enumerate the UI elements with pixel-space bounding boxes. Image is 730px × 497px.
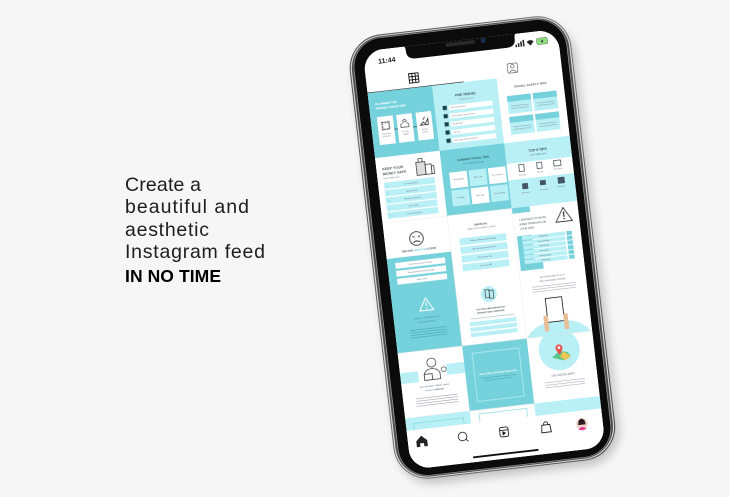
post: get the best travel deals bbox=[398, 346, 470, 418]
post: summer travel tips: Check weather bbox=[494, 191, 506, 195]
post: terms and conditions: PROPERTY AND CONDITIONS bbox=[477, 309, 505, 315]
post: keep your money safe: KEEP YOUR bbox=[382, 165, 404, 171]
post: keep your money safe: 5 bbox=[389, 214, 392, 218]
post: use google maps: USE GOOGLE MAPS bbox=[551, 372, 575, 378]
icon: search bbox=[458, 432, 469, 442]
post: keep your money safe: Beware of pickpockets bbox=[404, 196, 422, 201]
post: summer travel tips bbox=[440, 143, 512, 216]
post: unusual: Pack a power strip bbox=[478, 254, 492, 259]
post: top 6 tips: FOR TRAVELLERS bbox=[530, 152, 547, 157]
post: planning the perfect road trip: destination bbox=[383, 134, 391, 138]
post: unusual: UNUSUAL bbox=[473, 221, 488, 227]
post: keep your money safe: Split your cash bbox=[406, 189, 418, 193]
post: unusual: Get a local SIM bbox=[480, 263, 492, 267]
notch bbox=[401, 32, 519, 60]
post: 7 mistakes to avoid bbox=[512, 201, 585, 273]
icon: nervous face bbox=[409, 231, 424, 246]
post: summer travel tips: SUMMER TRAVEL TIPS bbox=[457, 155, 489, 162]
icon: tagged tab bbox=[507, 63, 518, 73]
post: keep your money safe bbox=[375, 151, 447, 223]
post: use google maps bbox=[526, 325, 600, 404]
post: 7 mistakes to avoid: No backups bbox=[542, 259, 550, 262]
post: summer travel tips: Pack light bbox=[457, 196, 465, 200]
post: pre-travel checklist: Get travel insurance bbox=[451, 105, 466, 109]
post: framed teal quote bbox=[462, 338, 534, 411]
text block: headline: beautiful and bbox=[125, 196, 249, 218]
post: travel safety tips bbox=[506, 70, 570, 136]
post: 7 mistakes to avoid: Bad planning bbox=[539, 244, 549, 248]
post: 7 mistakes to avoid: Not researching bbox=[538, 239, 549, 243]
post: summer travel tips: Use sunscreen bbox=[492, 173, 503, 177]
post: keep your money safe: 2 bbox=[387, 191, 389, 196]
post: top 6 tips: Get insured bbox=[540, 188, 548, 191]
post: 7 mistakes to avoid: Overpacking bbox=[539, 235, 548, 238]
post: summer travel tips: Stay hydrated bbox=[453, 177, 464, 181]
phone mockup bbox=[346, 12, 622, 487]
post: pre-travel checklist: PRE-TRAVEL bbox=[455, 91, 477, 98]
icon: luggage bbox=[415, 157, 435, 175]
post: 7 mistakes to avoid: Trusting strangers bbox=[539, 253, 552, 257]
post: buy a sim card with phone: ANY VIDEOS AND DRIVING bbox=[540, 277, 566, 283]
post: tips for nervous flyers: Keep yourself busy during the flight bbox=[408, 268, 435, 274]
post: top 6 tips: Save money bbox=[554, 168, 562, 171]
post: pre-travel checklist: Get cash bbox=[453, 130, 460, 134]
grid gaps bbox=[382, 201, 600, 418]
icon: shopping bag bbox=[541, 421, 551, 433]
post: 7 mistakes to avoid: No insurance bbox=[540, 249, 550, 252]
post: top 6 tips: TOP 6 TIPS bbox=[528, 147, 548, 153]
text block: headline: Instagram feed bbox=[125, 241, 265, 263]
home indicator bbox=[473, 449, 539, 458]
phone shadow bbox=[351, 20, 622, 487]
post: pre-travel checklist: Pay your bills bbox=[452, 122, 463, 126]
post: at the airport: AT THE AIRPORT bbox=[418, 319, 437, 324]
post: tips for nervous flyers: TIPS FOR NERVOUS FLYERS bbox=[401, 247, 437, 254]
row of partly visible posts bbox=[405, 396, 602, 434]
post: tips for nervous flyers bbox=[382, 224, 455, 288]
post: top 6 tips: Plan ahead bbox=[522, 192, 530, 195]
icon: home bbox=[416, 435, 428, 447]
post: pre-travel checklist: Check passport and visa dates bbox=[451, 112, 475, 118]
icon: alert triangle bbox=[418, 297, 434, 311]
post: 7 mistakes to avoid: 7 MISTAKES TO AVOID bbox=[519, 216, 546, 222]
post: get the best travel deals: GET THE BEST TRAVEL DEALS bbox=[420, 383, 450, 389]
icon: warning triangle bbox=[554, 207, 572, 222]
post: pre-travel checklist: Make copies of your documents bbox=[454, 136, 478, 142]
post: top 6 tips: Book online bbox=[557, 185, 566, 188]
post: keep your money safe: 4 bbox=[389, 206, 391, 210]
post: keep your money safe: 3 bbox=[388, 199, 390, 203]
text block: headline: aesthetic bbox=[125, 219, 209, 241]
post: top 6 tips: Stay safe bbox=[537, 170, 544, 174]
post: terms and conditions: YOU DON'T HAVE AND BUTTON bbox=[476, 305, 506, 312]
post: planning the perfect road trip: Start the bbox=[422, 127, 428, 131]
post: keep your money safe: Use a money belt bbox=[404, 181, 418, 185]
post: framed teal quote: USE A CREDIT CARD WHEN TRAVELLING bbox=[479, 369, 517, 376]
post: at the airport bbox=[390, 281, 462, 353]
post: keep your money safe: 1 bbox=[386, 184, 388, 188]
post: unusual: TRAVEL TIPS YOU NEED TO KNOW bbox=[467, 225, 496, 231]
post: planning the perfect road trip: PERFECT ROAD TRIP bbox=[376, 103, 406, 111]
profile tabs bbox=[363, 29, 562, 93]
post: keep your money safe: Use a hotel safe box bbox=[407, 211, 422, 215]
icon: reels bbox=[499, 427, 509, 437]
status time: 11:44 bbox=[378, 57, 396, 66]
text block: headline bbox=[125, 174, 265, 286]
icon: battery bbox=[536, 37, 548, 45]
icon: phone checklist bbox=[485, 289, 494, 299]
post: planning the perfect road trip: journey bbox=[422, 131, 428, 134]
speaker bbox=[445, 40, 475, 47]
post: planning the perfect road trip: Choose your bbox=[382, 133, 392, 136]
post: tips for nervous flyers: Bring a friend bbox=[417, 277, 427, 281]
text block: headline: IN NO TIME bbox=[125, 266, 221, 286]
camera bbox=[480, 38, 486, 43]
icon: hands holding phone bbox=[541, 296, 569, 332]
icon: map pin bbox=[552, 344, 571, 360]
post: keep your money safe: Carry a wallet bbox=[408, 203, 419, 208]
post: summer travel tips: Wear a hat bbox=[474, 175, 483, 179]
post: buy a sim card with phone bbox=[528, 266, 592, 338]
post: summer travel tips: FOR YOUR NEXT HOLIDAY bbox=[463, 160, 485, 166]
bottom navigation bbox=[407, 408, 606, 470]
phone body bbox=[346, 13, 619, 482]
post: planning the perfect road trip: PLANNING THE bbox=[375, 100, 397, 106]
post: keep your money safe: MONEY SAFE bbox=[383, 170, 407, 176]
post: travel safety tips: TRAVEL SAFETY TIPS bbox=[514, 81, 547, 89]
post: summer travel tips: Book early bbox=[476, 193, 484, 197]
post: planning the perfect road trip bbox=[367, 86, 440, 158]
icon: profile avatar bbox=[575, 417, 588, 431]
post: planning the perfect road trip: luggage bbox=[403, 133, 409, 136]
icon: grid tab bbox=[408, 73, 419, 83]
post: planning the perfect road trip: Pack your bbox=[402, 131, 410, 133]
post: at the airport: WHAT TO PREPARE FOR bbox=[414, 315, 440, 321]
post: unusual: Roll your clothes instead of folding bbox=[470, 236, 496, 242]
post: unusual bbox=[459, 222, 510, 272]
text block: headline: Create a bbox=[125, 174, 201, 196]
post: top 6 tips bbox=[504, 136, 577, 208]
icon: traveller with laptop bbox=[422, 357, 447, 380]
post: 7 mistakes to avoid: YOUR OWN bbox=[520, 226, 534, 231]
post: unusual: Use a bar of soap for freshness bbox=[472, 245, 496, 251]
icon: wifi bbox=[526, 40, 534, 46]
screen bbox=[362, 28, 606, 470]
post: pre-travel checklist bbox=[432, 78, 504, 151]
post: pre-travel checklist: CHECKLIST bbox=[459, 97, 474, 101]
post: top 6 tips: Travel light bbox=[519, 173, 527, 177]
post: buy a sim card with phone: BUY A FIRST-AID KIT & UP bbox=[540, 273, 565, 279]
post: terms and conditions bbox=[470, 286, 518, 338]
post: tips for nervous flyers: Know what to expect on board bbox=[409, 260, 432, 266]
photo grid bbox=[367, 71, 602, 434]
post: get the best travel deals: RIGHT ON BUDGET bbox=[426, 388, 445, 392]
post: keep your money safe: WHILE TRAVELLING bbox=[383, 175, 400, 180]
icon: signal bars bbox=[515, 40, 525, 47]
post: 7 mistakes to avoid: WHEN TRAVELING ON bbox=[519, 220, 547, 227]
